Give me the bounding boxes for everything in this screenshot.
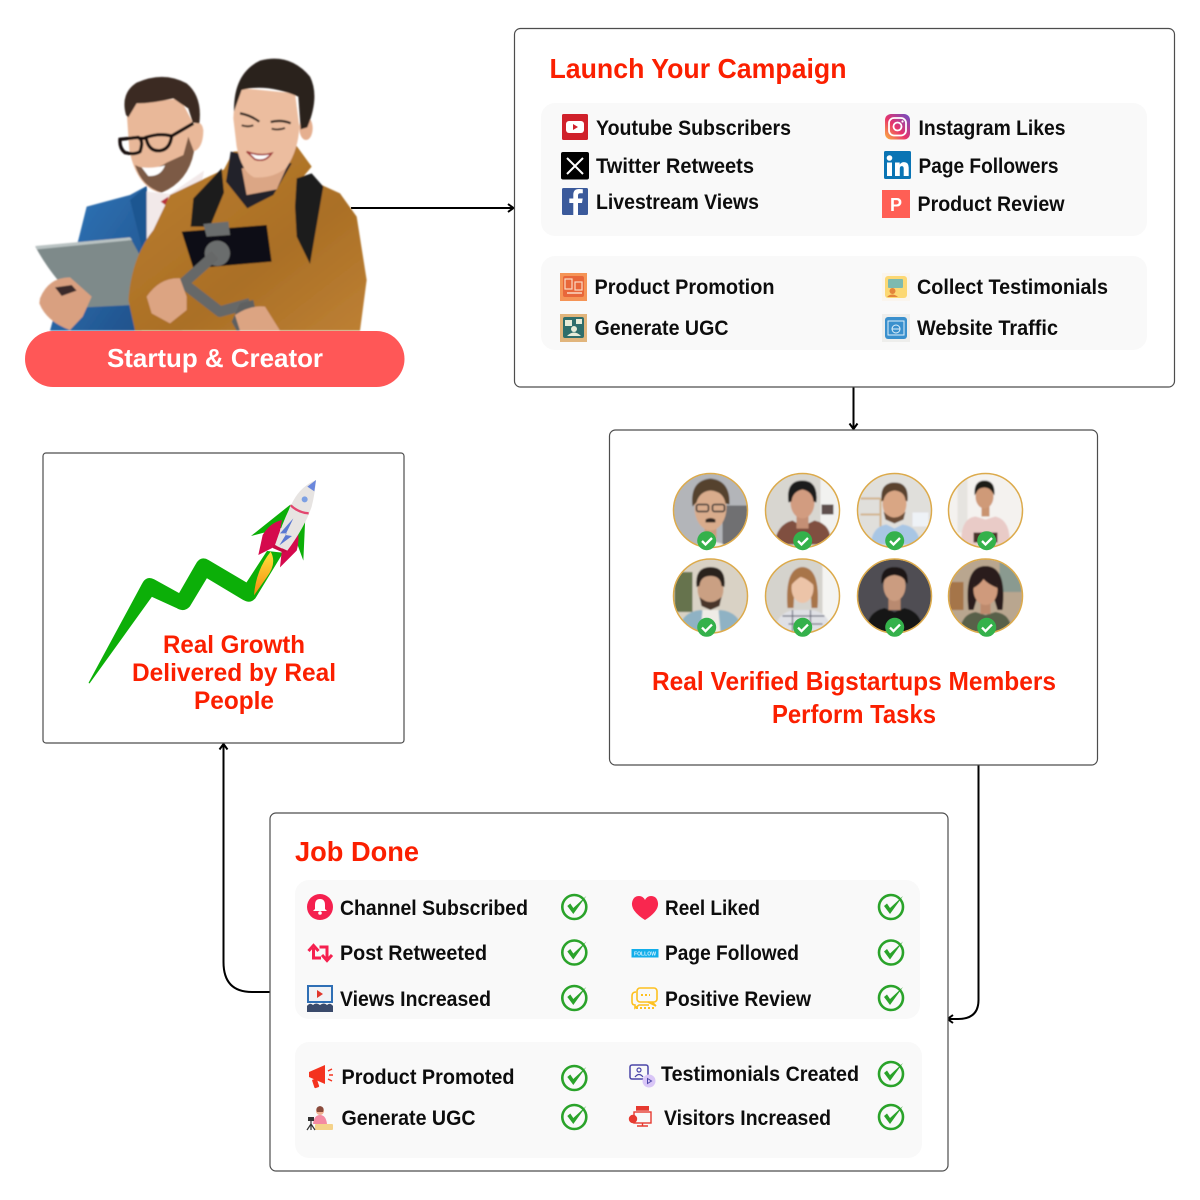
panel: verified members (610, 430, 1098, 765)
text: Product Promotion: Product Promotion (594, 276, 774, 299)
icon: product review: P (890, 195, 902, 215)
icon: facebook (562, 188, 588, 215)
icon: visitors (630, 1106, 651, 1126)
icon: youtube (562, 114, 588, 140)
sub-panel: growth services (541, 256, 1147, 350)
text: verified members caption (652, 666, 1056, 729)
text: verified members caption: Real Verified Bigstartups Members (652, 666, 1056, 696)
text: Instagram Likes: Instagram Likes (918, 117, 1066, 140)
rocket (251, 480, 316, 595)
illustration: two creators (35, 59, 367, 331)
text: Testimonials Created: Testimonials Created (661, 1063, 859, 1086)
text: real growth caption (132, 631, 336, 715)
avatar 5 (672, 558, 748, 634)
icon: retweet (308, 946, 332, 960)
text: Youtube Subscribers: Youtube Subscribers (596, 117, 791, 140)
man with gimbal (128, 59, 367, 331)
chart: growth arrow with rocket (89, 480, 316, 683)
growth arrow (89, 552, 282, 683)
panel: launch your campaign (514, 28, 1174, 387)
check marks (562, 895, 903, 1129)
label pill: Startup and Creator: Startup & Creator (107, 343, 323, 373)
text: Page Followed: Page Followed (665, 942, 799, 965)
icon: product review (882, 190, 910, 218)
text: Positive Review: Positive Review (665, 988, 812, 1011)
icon: instagram (885, 114, 910, 140)
icon: collect testimonials (882, 273, 910, 301)
icon: views (307, 986, 333, 1012)
avatar 4 (948, 472, 1024, 548)
text: Product Review: Product Review (918, 193, 1065, 216)
heading: launch your campaign: Launch Your Campaign (550, 53, 846, 84)
text: Product Promoted: Product Promoted (342, 1066, 514, 1089)
panel: real growth (43, 453, 404, 743)
text: Post Retweeted: Post Retweeted (340, 942, 487, 965)
text: Reel Liked: Reel Liked (665, 897, 760, 920)
arrow: job done to growth (220, 744, 270, 992)
icon: ugc creator (307, 1106, 333, 1130)
icon: testimonial video (630, 1065, 656, 1088)
avatar 8 (948, 558, 1024, 634)
avatar 3 (856, 472, 932, 548)
icon: product promotion (560, 273, 587, 301)
icon: follow button (632, 949, 658, 958)
label pill: Startup and Creator (25, 331, 404, 387)
text: Website Traffic: Website Traffic (917, 317, 1058, 340)
text: real growth caption: People (194, 687, 274, 715)
text: Livestream Views: Livestream Views (596, 191, 759, 214)
arrow: campaign to members (850, 387, 858, 429)
sub-panel: social services (541, 103, 1147, 236)
text: Generate UGC: Generate UGC (594, 317, 728, 340)
text: Collect Testimonials: Collect Testimonials (917, 276, 1108, 299)
text: Visitors Increased: Visitors Increased (664, 1107, 831, 1130)
icon: linkedin (884, 151, 911, 179)
avatar 7 (856, 558, 932, 634)
verified badges (697, 531, 996, 637)
text: Page Followers: Page Followers (918, 155, 1058, 178)
text: verified members caption: Perform Tasks (772, 699, 936, 729)
text: real growth caption: Real Growth (163, 631, 305, 659)
text: Generate UGC: Generate UGC (342, 1107, 476, 1130)
panel: job done (270, 813, 948, 1171)
text: Views Increased: Views Increased (340, 988, 491, 1011)
avatar 1 (672, 472, 750, 548)
avatar grid (672, 472, 1024, 637)
icon: website traffic (882, 314, 910, 342)
icon: review bubbles (632, 988, 657, 1008)
man with tablet (35, 77, 204, 331)
avatar 6 (764, 558, 842, 634)
icon: megaphone (309, 1065, 333, 1088)
text: Channel Subscribed: Channel Subscribed (340, 897, 528, 920)
icon: bell (307, 894, 333, 920)
icon: follow button: FOLLOW (634, 952, 657, 958)
sub-panel: social results (295, 880, 920, 1019)
sub-panel: growth results (295, 1042, 922, 1158)
arrow: members to job done (948, 765, 978, 1023)
text: real growth caption: Delivered by Real (132, 659, 336, 687)
icon: heart (632, 896, 658, 920)
avatar 2 (764, 472, 842, 548)
text: Twitter Retweets: Twitter Retweets (596, 155, 754, 178)
arrow: creator to campaign (351, 204, 514, 212)
icon: X (561, 152, 589, 180)
heading: job done: Job Done (295, 836, 419, 867)
icon: generate ugc (560, 314, 587, 342)
